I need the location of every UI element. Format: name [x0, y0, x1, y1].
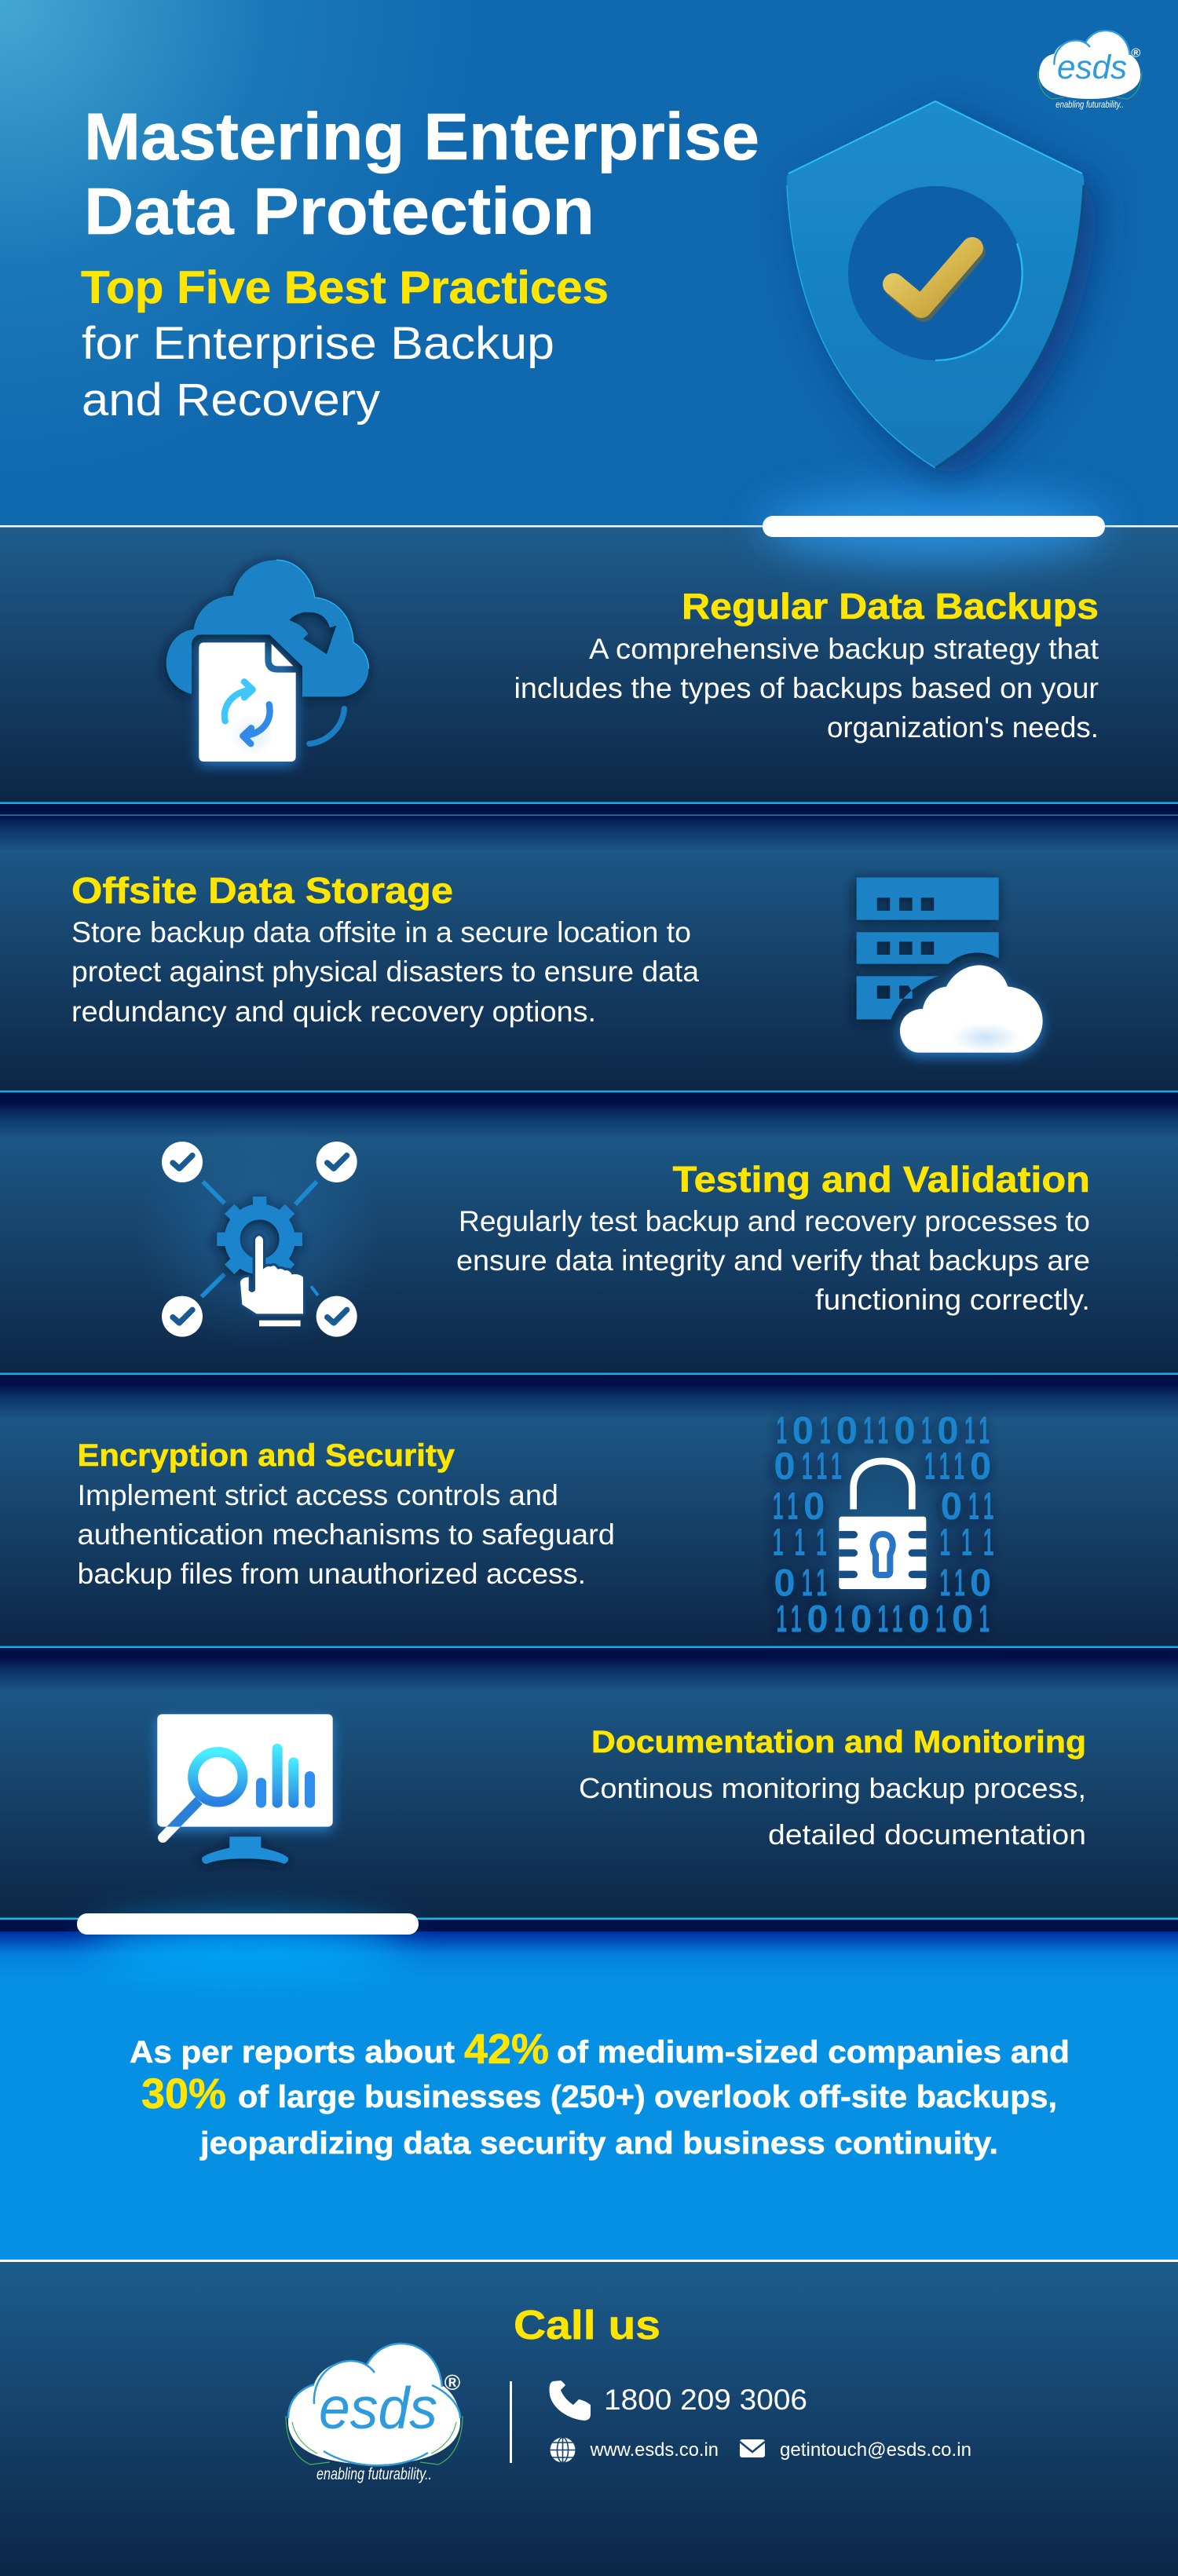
- panel: contact footer background: [0, 2261, 1178, 2576]
- binary digits: 00: [774, 1445, 991, 1488]
- phone number: 1800 209 3006: [604, 2384, 807, 2416]
- icon: gear: [217, 1197, 302, 1274]
- icon: cloud backup file: [166, 560, 368, 762]
- body text: redundancy and quick recovery options.: [71, 996, 596, 1028]
- icon: magnifier: [163, 1752, 243, 1838]
- icon: mail: [740, 2439, 765, 2457]
- body text: Implement strict access controls and: [77, 1479, 558, 1511]
- icon: gear, hand and checks: [136, 1120, 382, 1350]
- icon: hand pointer: [240, 1236, 303, 1326]
- icon: padlock in binary digits: [773, 1409, 993, 1641]
- logo: esds top right: enabling futurability..: [1055, 99, 1124, 110]
- body text: [456, 1205, 1090, 1316]
- panel: statistic callout background: [0, 1931, 1178, 2260]
- icon: glowing cloud: [900, 965, 1043, 1053]
- icon: connectors: [202, 1182, 318, 1297]
- body text: [71, 916, 699, 1028]
- email: getintouch@esds.co.in: [780, 2439, 971, 2461]
- block: testing and validation: [456, 1159, 1090, 1316]
- icon: server racks: [857, 878, 999, 1019]
- logo: esds footer: ®: [444, 2370, 461, 2395]
- block: documentation and monitoring: [579, 1725, 1086, 1851]
- icon: monitor with magnifier and bars: [157, 1714, 333, 1864]
- icon: servers and cloud: [857, 878, 1043, 1053]
- subtitle: and Recovery: [82, 375, 380, 426]
- icon: shield with gold check: [787, 101, 1084, 468]
- icon: phone: [550, 2381, 591, 2421]
- body text: functioning correctly.: [815, 1284, 1090, 1316]
- subtitle: for Enterprise Backup: [82, 318, 554, 369]
- header panel background: [0, 0, 1178, 526]
- decorative pill: top: [763, 516, 1105, 537]
- icon: lock body: [839, 1517, 926, 1589]
- binary digits: 00: [774, 1562, 991, 1604]
- decorative pill: bottom: [77, 1913, 419, 1935]
- heading: Documentation and Monitoring: [591, 1725, 1086, 1759]
- panel: documentation and monitoring background: [0, 1658, 1178, 1918]
- body text: Regularly test backup and recovery processes to: [459, 1205, 1090, 1237]
- icon: globe: [550, 2437, 575, 2462]
- panel: encryption and security background: [0, 1385, 1178, 1646]
- icon: bars: [256, 1744, 315, 1808]
- logo: esds top right: ®: [1131, 46, 1141, 60]
- logo: esds top right: [1037, 31, 1142, 110]
- icon: cloud with arrow cut-out: [166, 560, 368, 696]
- body text: protect against physical disasters to ensure data: [71, 955, 699, 988]
- heading: call us: Call us: [514, 2303, 660, 2348]
- icon: file page: [199, 642, 296, 762]
- heading: Regular Data Backups: [682, 586, 1099, 627]
- binary digits: 1111: [773, 1485, 993, 1528]
- top glow under shield pill: [762, 493, 1107, 562]
- binary digits: 1111: [802, 1562, 965, 1605]
- callout: statistics text: of large businesses (250+) overlook off-site backups,: [238, 2080, 1057, 2114]
- body text: [77, 1479, 615, 1590]
- binary digits: 1111111: [777, 1409, 990, 1452]
- callout: statistics text: 42%: [464, 2026, 549, 2073]
- subtitle: [82, 318, 554, 426]
- callout: statistics text: jeopardizing data security and business continuity.: [199, 2126, 998, 2161]
- block: regular data backups: [514, 586, 1099, 744]
- binary digits: 111111: [773, 1522, 993, 1564]
- body text: backup files from unauthorized access.: [77, 1558, 586, 1590]
- callout: statistics text: As per reports about: [130, 2035, 455, 2070]
- binary digits: 0000: [807, 1598, 973, 1640]
- block: offsite data storage: [71, 870, 699, 1028]
- body text: organization's needs.: [827, 711, 1099, 744]
- icon: screen: [157, 1714, 333, 1827]
- body text: [579, 1772, 1086, 1851]
- block: encryption and security: [77, 1438, 615, 1590]
- heading: Testing and Validation: [672, 1159, 1090, 1200]
- binary digits: 00: [803, 1485, 962, 1528]
- icon: refresh arrows: [225, 681, 270, 744]
- title: Mastering Enterprise: [84, 100, 759, 174]
- title: Data Protection: [84, 174, 594, 248]
- panel: regular data backups background: [0, 526, 1178, 802]
- logo: esds top right: esds: [1057, 49, 1127, 86]
- binary digits: 111111: [802, 1445, 964, 1488]
- body text: Store backup data offsite in a secure location to: [71, 916, 691, 948]
- logo: esds footer: esds: [319, 2375, 437, 2441]
- body text: detailed documentation: [768, 1818, 1086, 1851]
- binary digits: [773, 1409, 993, 1641]
- logo: esds footer: enabling futurability..: [316, 2465, 432, 2483]
- logo: esds footer: [286, 2344, 463, 2483]
- callout: statistics text: of medium-sized companies and: [557, 2035, 1070, 2070]
- icon: check circles: [162, 1142, 357, 1337]
- panel: offsite data storage background: [0, 815, 1178, 1091]
- body text: ensure data integrity and verify that backups are: [456, 1244, 1090, 1277]
- icon: return arc: [309, 709, 344, 744]
- binary digits: 0000: [792, 1409, 959, 1452]
- website: www.esds.co.in: [590, 2439, 719, 2461]
- heading: Encryption and Security: [77, 1438, 455, 1473]
- body text: includes the types of backups based on your: [514, 672, 1099, 704]
- body text: A comprehensive backup strategy that: [589, 633, 1099, 665]
- icon: stand: [202, 1836, 288, 1864]
- callout: statistics text: [130, 2026, 1070, 2161]
- body text: authentication mechanisms to safeguard: [77, 1518, 615, 1551]
- heading: Offsite Data Storage: [71, 870, 453, 911]
- title: [84, 100, 759, 248]
- icon: shackle: [854, 1461, 912, 1509]
- body text: [514, 633, 1099, 744]
- panel: testing and validation background: [0, 1103, 1178, 1373]
- body text: Continous monitoring backup process,: [579, 1772, 1086, 1804]
- callout: statistics text: 30%: [141, 2070, 226, 2117]
- binary digits: 1111111: [777, 1598, 990, 1641]
- subtitle highlight: Top Five Best Practices: [81, 262, 609, 313]
- bottom glow under left pill: [90, 1924, 404, 1968]
